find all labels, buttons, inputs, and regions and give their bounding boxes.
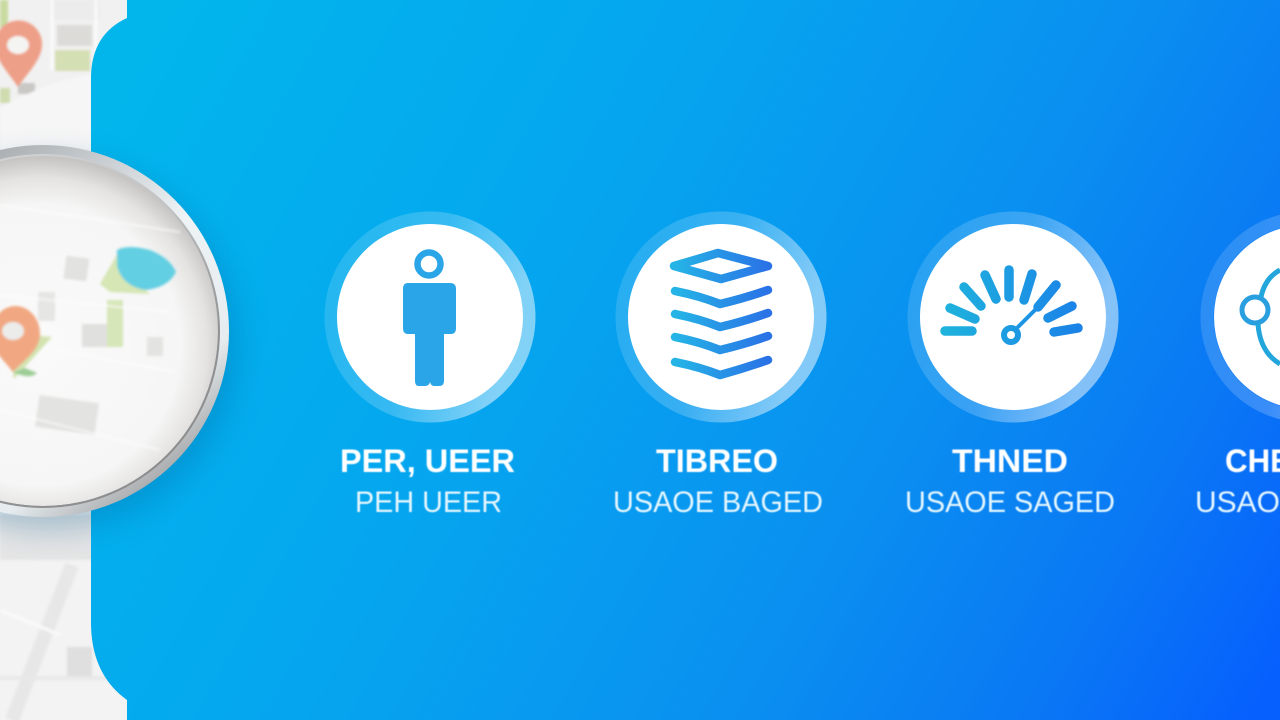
icon: person	[403, 252, 456, 386]
item: thned	[905, 218, 1115, 519]
lens rim	[0, 145, 229, 517]
icon ring	[914, 218, 1112, 416]
subheading: USAOE SAGED	[905, 486, 1115, 519]
icon: lens map pin	[0, 306, 40, 372]
item: per user	[331, 218, 529, 519]
subheading: PEH UEER	[355, 486, 502, 519]
subheading: USAOE BAGED	[613, 486, 823, 519]
heading: THNED	[952, 443, 1068, 479]
icon: layers	[674, 253, 768, 375]
magnifying glass	[0, 145, 238, 530]
item: cut off at right edge	[1195, 218, 1280, 519]
icon: top map pin	[0, 21, 42, 87]
map background	[0, 0, 140, 720]
icon ring	[622, 218, 820, 416]
icon: network nodes	[1242, 270, 1280, 364]
icon ring	[1207, 218, 1280, 416]
heading: TIBREO	[656, 443, 778, 479]
heading: PER, UEER	[340, 443, 515, 479]
item: tiered	[613, 218, 823, 519]
icon ring	[331, 218, 529, 416]
lens map	[0, 156, 218, 506]
icon: gauge	[945, 270, 1078, 342]
